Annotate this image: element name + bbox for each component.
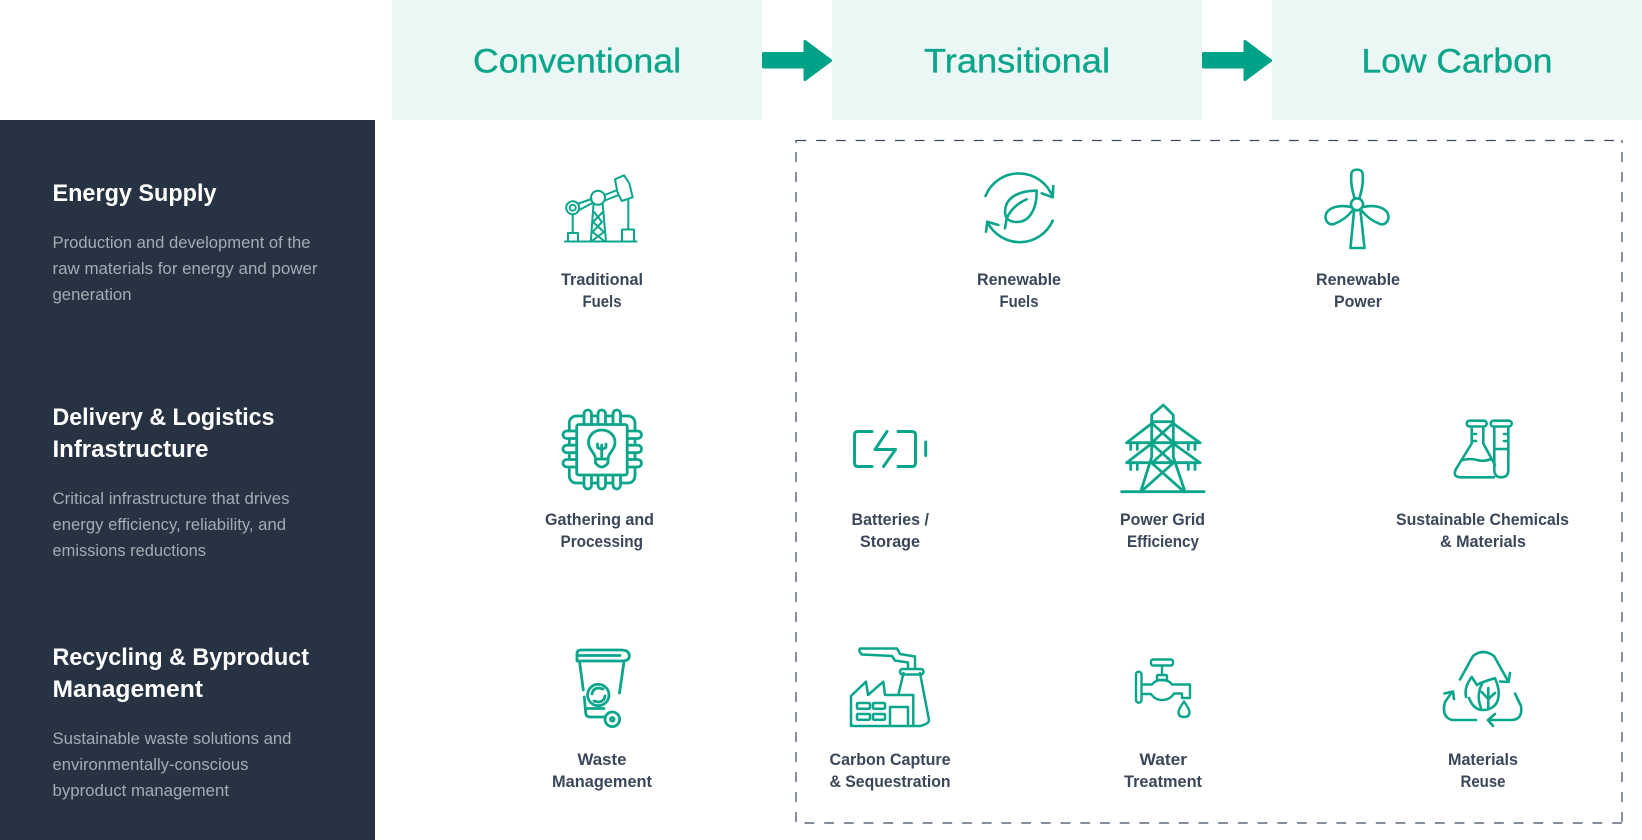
- label: [1124, 751, 1203, 791]
- panel: categories sidebar: [0, 120, 375, 840]
- arrow: Conventional to Transitional: [764, 42, 830, 80]
- label: Waste: [578, 751, 626, 769]
- text: Energy Supply description: generation: [52, 286, 132, 304]
- label: [1120, 511, 1205, 551]
- text: Recycling description: environmentally-conscious: [52, 756, 248, 774]
- text: Delivery description: Critical infrastructure that drives: [52, 490, 290, 508]
- icon: recycling leaf: [986, 173, 1053, 242]
- label: Fuels: [582, 293, 622, 311]
- label: Batteries /: [852, 511, 929, 529]
- icon: pump jack: [565, 175, 636, 242]
- label: Storage: [860, 533, 920, 551]
- item: Waste Management: [552, 650, 653, 791]
- text: Recycling description: Sustainable waste solutions and: [52, 730, 292, 748]
- heading: Delivery & Logistics Infrastructure: [52, 404, 274, 463]
- text: Delivery description: [52, 490, 290, 560]
- label: [830, 751, 950, 791]
- heading: Delivery & Logistics Infrastructure: Delivery & Logistics: [52, 404, 274, 431]
- label: Processing: [560, 533, 643, 551]
- heading: Recycling & Byproduct Management: [52, 644, 309, 703]
- label: Traditional: [561, 271, 643, 289]
- label: & Materials: [1440, 533, 1526, 551]
- text: Recycling description: [52, 730, 292, 800]
- label: Reuse: [1460, 773, 1506, 791]
- label: [545, 511, 654, 551]
- item: Water Treatment: [1124, 660, 1203, 791]
- label: Carbon Capture: [830, 751, 950, 769]
- column header: Transitional: [832, 0, 1202, 120]
- label: [552, 751, 653, 791]
- column header: Conventional: [392, 0, 762, 120]
- icon: recycling arrows with leaves: [1444, 652, 1521, 726]
- icon: chemistry flasks: [1455, 421, 1512, 477]
- icon: chip with light bulb: [563, 410, 642, 489]
- text: Recycling description: byproduct management: [52, 782, 229, 800]
- label: Sustainable Chemicals: [1396, 511, 1569, 529]
- column header: Conventional: Conventional: [473, 42, 681, 80]
- text: Delivery description: energy efficiency, reliability, and: [52, 516, 286, 534]
- heading: Recycling & Byproduct Management: Management: [52, 676, 203, 703]
- item: Materials Reuse: [1444, 652, 1521, 791]
- item: Renewable Fuels: [977, 173, 1061, 311]
- icon: recycling bin: [577, 650, 629, 727]
- item: Traditional Fuels: [561, 175, 643, 311]
- icon: wind turbine: [1326, 170, 1388, 248]
- label: [1396, 511, 1569, 551]
- item: Gathering and Processing: [545, 410, 654, 551]
- heading: Recycling & Byproduct Management: Recycling & Byproduct: [52, 644, 309, 671]
- icon: faucet with droplet: [1136, 660, 1190, 717]
- label: Renewable: [1316, 271, 1400, 289]
- heading: Delivery & Logistics Infrastructure: Infrastructure: [52, 436, 208, 463]
- label: Fuels: [1000, 293, 1038, 311]
- arrow: Transitional to Low Carbon: [1204, 42, 1270, 80]
- item: Batteries / Storage: [852, 432, 929, 551]
- dashed box: transitional and low carbon grouping: [796, 140, 1622, 823]
- label: Water: [1140, 751, 1188, 769]
- label: [1316, 271, 1400, 311]
- label: Power: [1334, 293, 1383, 311]
- column header: Transitional: Transitional: [924, 42, 1110, 80]
- label: Efficiency: [1127, 533, 1199, 551]
- item: Renewable Power: [1316, 170, 1400, 311]
- heading: Energy Supply: Energy Supply: [52, 180, 217, 207]
- label: Treatment: [1124, 773, 1203, 791]
- icon: transmission tower: [1122, 405, 1204, 492]
- label: & Sequestration: [830, 773, 950, 791]
- item: Sustainable Chemicals & Materials: [1396, 421, 1569, 551]
- icon: battery with lightning: [854, 432, 926, 466]
- text: Energy Supply description: raw materials for energy and power: [52, 260, 318, 278]
- label: Materials: [1448, 751, 1518, 769]
- item: Carbon Capture & Sequestration: [830, 648, 950, 791]
- column header: Low Carbon: [1272, 0, 1642, 120]
- text: Delivery description: emissions reductions: [52, 542, 206, 560]
- label: Power Grid: [1120, 511, 1205, 529]
- label: [852, 511, 929, 551]
- icon: factory: [851, 648, 929, 726]
- label: Renewable: [977, 271, 1061, 289]
- item: Power Grid Efficiency: [1120, 405, 1205, 551]
- text: Energy Supply description: Production and development of the: [52, 234, 310, 252]
- label: Management: [552, 773, 653, 791]
- column header: Low Carbon: Low Carbon: [1362, 42, 1552, 80]
- label: [561, 271, 643, 311]
- label: [977, 271, 1061, 311]
- text: Energy Supply description: [52, 234, 318, 304]
- label: [1448, 751, 1518, 791]
- label: Gathering and: [545, 511, 654, 529]
